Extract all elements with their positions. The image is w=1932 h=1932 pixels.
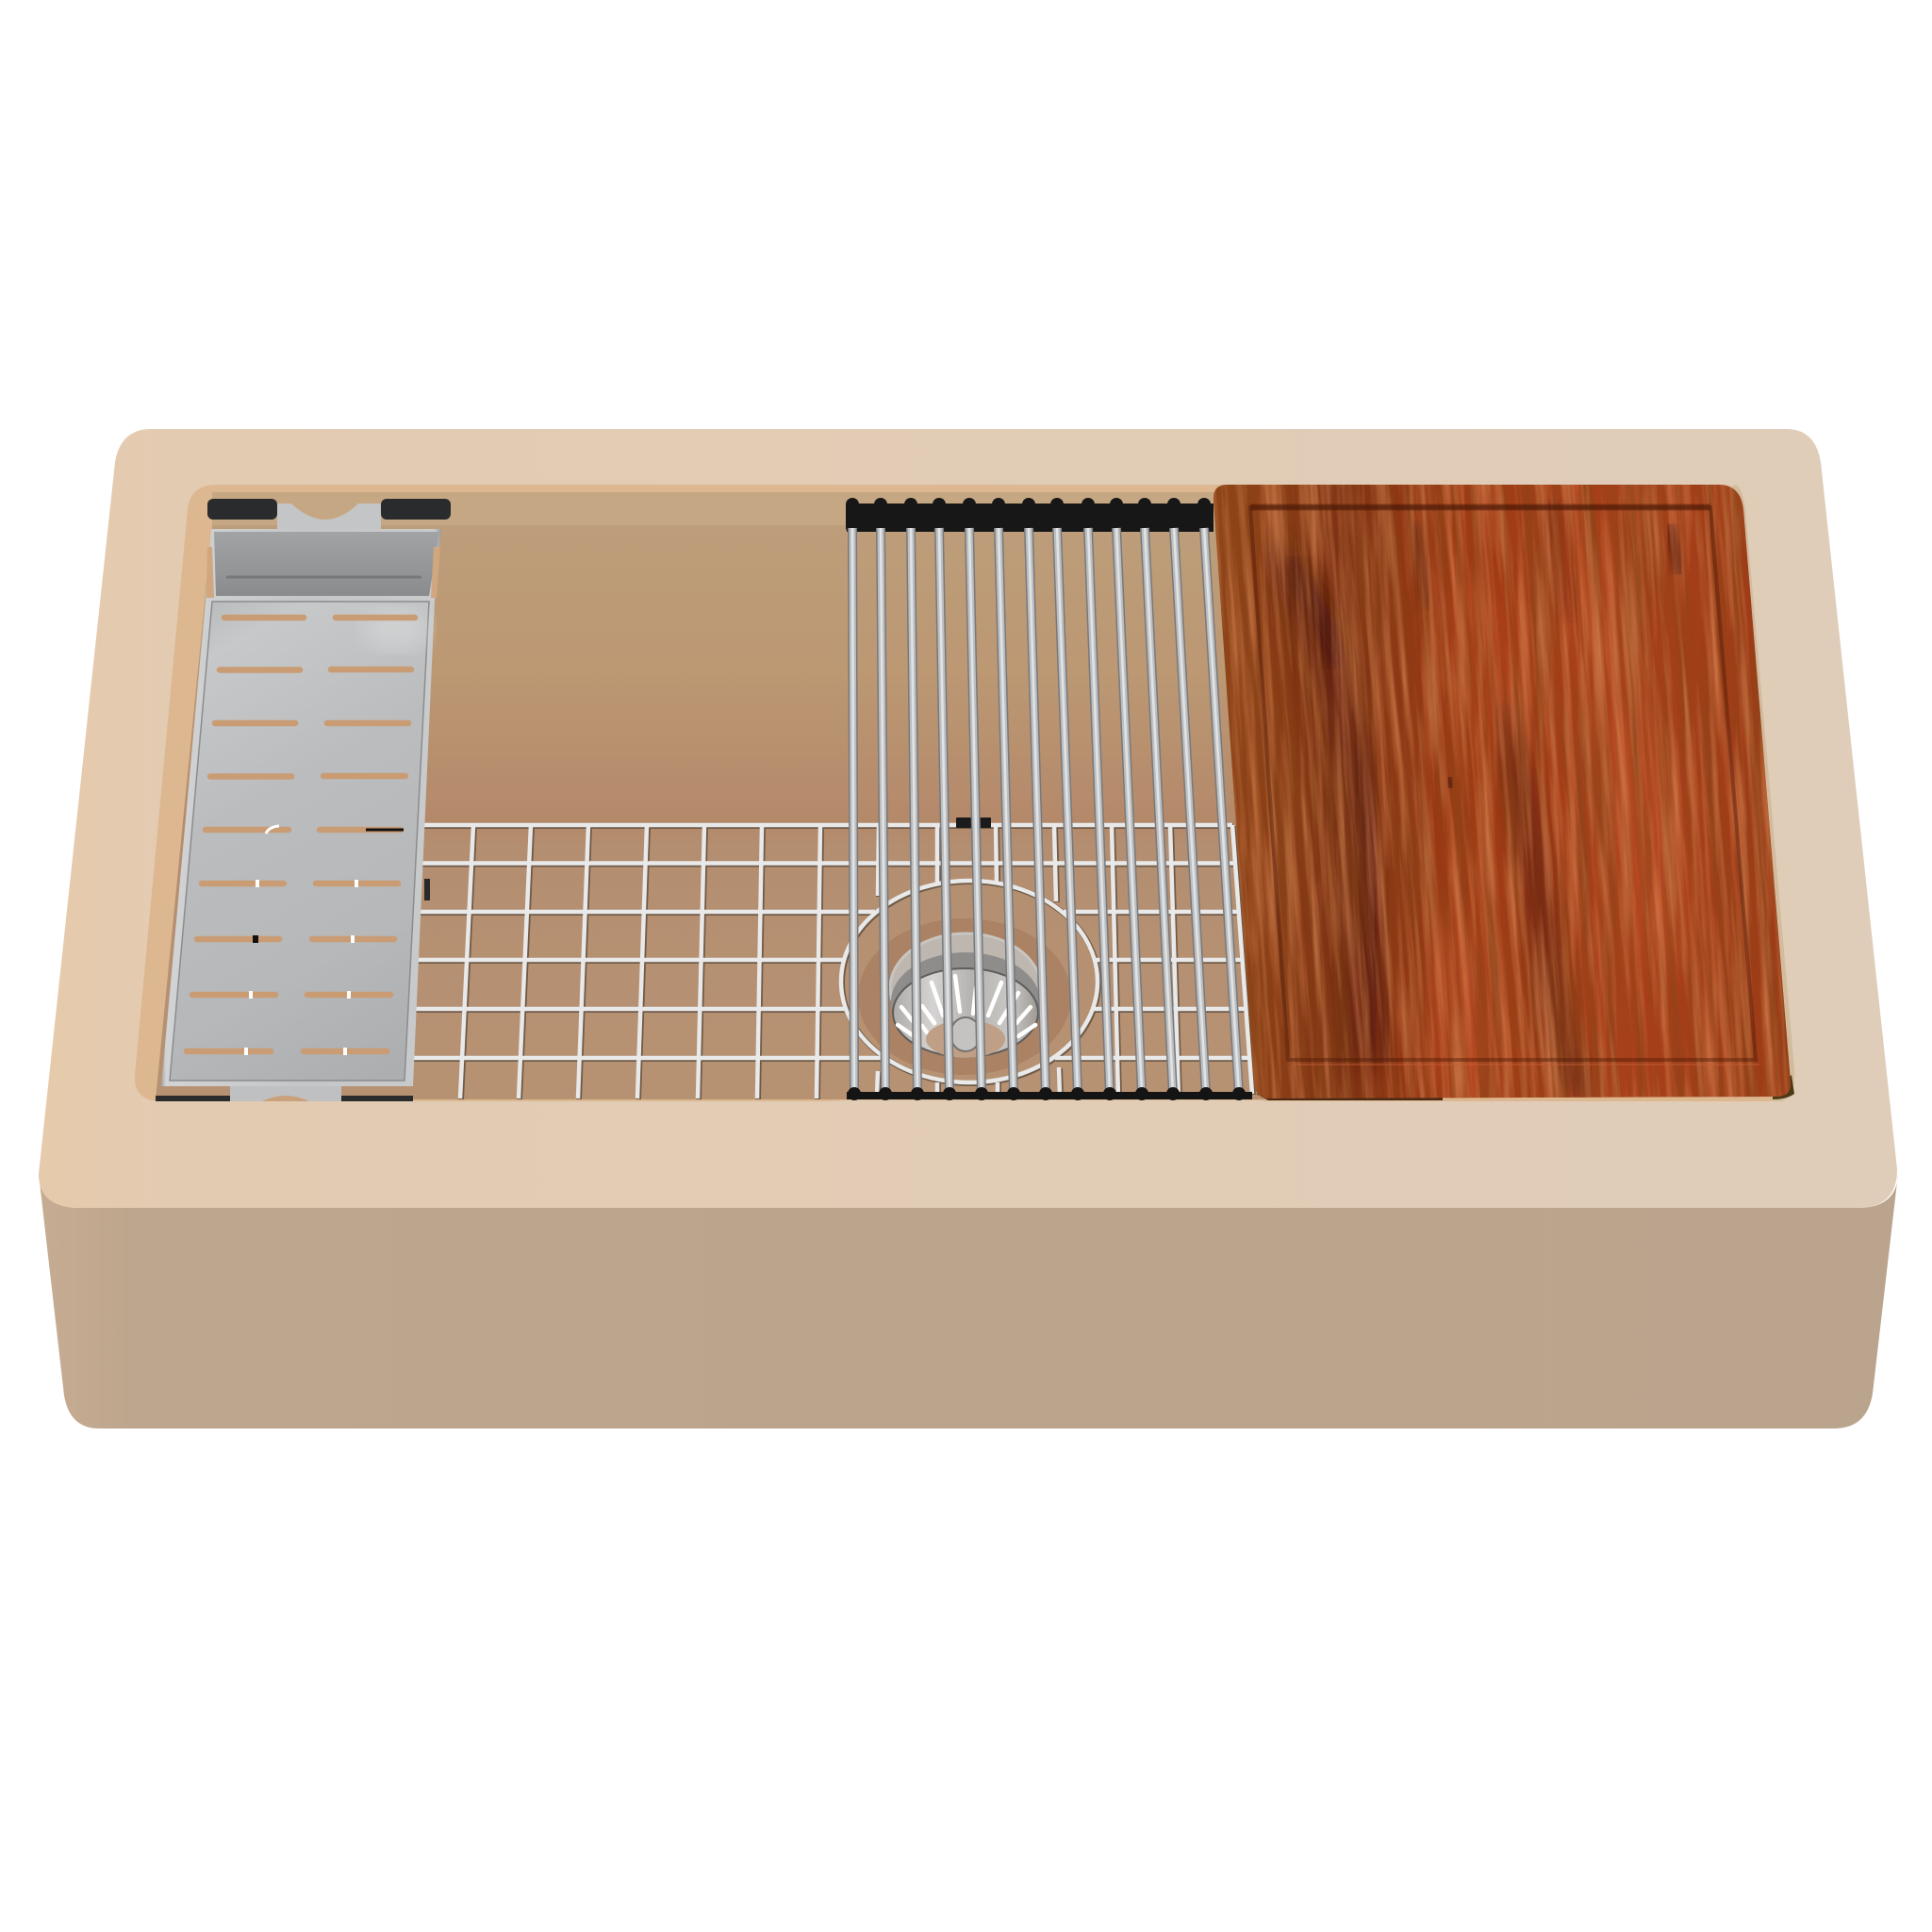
bottom rubber band [847, 1087, 1252, 1100]
grid wires [405, 825, 1252, 1098]
tray slots [187, 618, 415, 1051]
bottom handle notch [262, 1096, 309, 1101]
front apron [39, 1174, 1898, 1428]
top rim [39, 429, 1897, 1208]
board underside [1256, 1094, 1443, 1100]
basin [135, 485, 1794, 1101]
back shelf strip [212, 492, 1216, 525]
drain recess [858, 918, 1071, 1075]
wood surface [1213, 485, 1792, 1098]
board edge highlight [1773, 1075, 1794, 1099]
fine light grain [1214, 485, 1788, 1098]
bottom wire grid [405, 825, 1253, 1099]
strainer knob [950, 1017, 981, 1051]
roll-up drying rack [839, 498, 1263, 1104]
slot crossbars [246, 826, 404, 1055]
left peach window [206, 547, 214, 598]
bottom handle [230, 1086, 341, 1101]
rack rods [852, 528, 1239, 1094]
strainer basket [893, 968, 1038, 1057]
top tab right [381, 499, 451, 520]
drain flange [890, 933, 1041, 1043]
groove top shadow [1250, 504, 1710, 511]
grid shadow [406, 826, 1253, 1099]
cutting board [1213, 485, 1794, 1100]
illustration: workstation sink with accessories [39, 429, 1898, 1428]
right recess ledge [1726, 485, 1794, 1101]
tray handle [277, 504, 381, 530]
basin floor [156, 525, 1265, 1099]
top tab left [207, 499, 277, 520]
strainer centre [926, 1020, 1005, 1058]
drain [858, 918, 1071, 1075]
sink body [39, 429, 1898, 1428]
tray highlight [362, 609, 430, 651]
dark grain bands [1275, 509, 1680, 1084]
basin recess [135, 485, 1794, 1101]
bottom tab left [156, 1096, 230, 1101]
tray back wall [214, 532, 439, 596]
colander tray [156, 499, 451, 1101]
drain barrel [891, 952, 1040, 1050]
strainer slots [898, 976, 1035, 1036]
grid foot [424, 879, 430, 900]
top rubber band [846, 498, 1214, 534]
fine dark grain [1214, 485, 1791, 1098]
bottom tab right [341, 1096, 413, 1101]
lip covering rack base [839, 1100, 1263, 1104]
groove highlight [1294, 1064, 1759, 1065]
juice groove [1250, 507, 1756, 1060]
tray floor [170, 602, 429, 1081]
tray rim [161, 529, 441, 1086]
back wall crease [226, 575, 421, 579]
grid clip [956, 817, 991, 828]
right peach window [431, 547, 440, 598]
light grain bands [1447, 566, 1674, 1084]
